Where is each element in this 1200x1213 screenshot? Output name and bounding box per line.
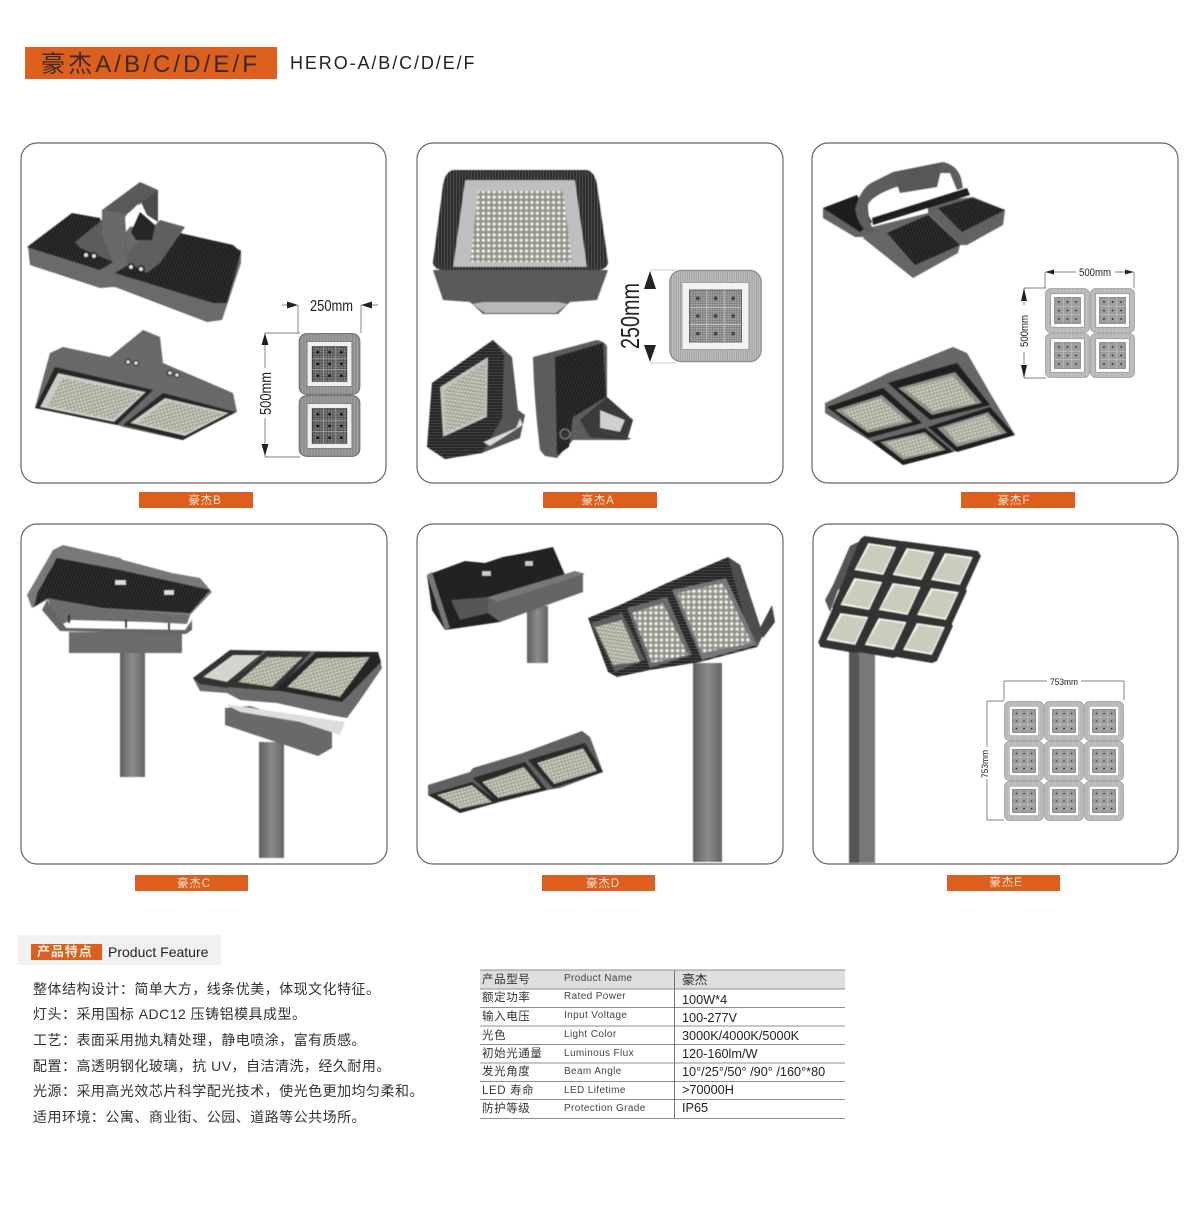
- specification table: IP65: [682, 1101, 708, 1115]
- label: 豪杰C: 豪杰C: [177, 876, 211, 890]
- section heading: product feature: Product Feature: [108, 944, 209, 960]
- specification table: 产品型号: [482, 972, 530, 986]
- feature list: 灯头：采用国标 ADC12 压铸铝模具成型。: [33, 1006, 306, 1022]
- feature list: 适用环境：公寓、商业街、公园、道路等公共场所。: [33, 1109, 366, 1125]
- specification table: 100-277V: [682, 1011, 738, 1025]
- pole lamp: back view D: [427, 547, 585, 663]
- dimension drawing: 250×500mm: 250mm: [310, 298, 353, 315]
- label: 豪杰A: 豪杰A: [581, 493, 615, 507]
- label: 豪杰A: [543, 492, 657, 508]
- pole lamp: front view C: [193, 650, 382, 858]
- dimension drawing: 250mm: [615, 270, 761, 363]
- specification table: Light Color: [564, 1029, 617, 1040]
- pole lamp: front view E: [818, 536, 981, 863]
- panel: 豪杰E: [813, 524, 1178, 864]
- lamp: front view A: [433, 170, 608, 314]
- specification table: 输入电压: [482, 1009, 530, 1023]
- specification table: >70000H: [682, 1083, 734, 1097]
- feature list: 配置：高透明钢化玻璃，抗 UV，自洁清洗，经久耐用。: [33, 1058, 391, 1074]
- lamp: back view B: [27, 182, 241, 322]
- dimension drawing: 500×500mm: [1019, 267, 1135, 378]
- specification table: Input Voltage: [564, 1010, 627, 1021]
- dimension drawing: 250×500mm: 500mm: [258, 372, 275, 415]
- lamp: back view F: [823, 162, 1005, 278]
- specification table: Product Name: [564, 973, 633, 984]
- section heading: product feature: [18, 935, 221, 965]
- panel: 豪杰F: [812, 143, 1178, 483]
- specification table: Rated Power: [564, 991, 626, 1002]
- label: 豪杰B: [139, 492, 253, 508]
- panel: 豪杰A: [417, 143, 783, 483]
- specification table: 120-160lm/W: [682, 1047, 757, 1061]
- lamp: back view A: [533, 340, 633, 458]
- specification table: Luminous Flux: [564, 1048, 634, 1059]
- lamp: angled front view A: [427, 340, 525, 459]
- dimension drawing: 753×753mm: 753mm: [980, 750, 991, 778]
- lamp: front view F: [825, 347, 1015, 465]
- title bar: 豪杰A/B/C/D/E/F: [41, 51, 260, 78]
- specification table: 3000K/4000K/5000K: [682, 1029, 800, 1043]
- subtitle: HERO-A/B/C/D/E/F: [290, 53, 476, 73]
- dimension drawing: 500×500mm: 500mm: [1079, 267, 1111, 279]
- label: 豪杰E: 豪杰E: [989, 875, 1023, 889]
- pole lamp: front view D: [588, 557, 775, 862]
- specification table: LED 寿命: [482, 1083, 534, 1097]
- feature list: [33, 981, 424, 1125]
- specification table: 发光角度: [482, 1064, 530, 1078]
- feature list: 工艺：表面采用抛丸精处理，静电喷涂，富有质感。: [33, 1032, 366, 1048]
- specification table: Protection Grade: [564, 1103, 646, 1114]
- dimension drawing: 250mm: 250mm: [615, 283, 645, 349]
- feature list: 光源：采用高光效芯片科学配光技术，使光色更加均匀柔和。: [33, 1083, 424, 1099]
- specification table: 额定功率: [482, 990, 530, 1004]
- pole lamp: back view C: [27, 545, 212, 777]
- label: 豪杰E: [947, 875, 1060, 891]
- specification table: Beam Angle: [564, 1066, 622, 1077]
- section heading: product feature: 产品特点: [37, 944, 93, 959]
- dimension drawing: 500×500mm: 500mm: [1019, 315, 1031, 347]
- feature list: 整体结构设计：简单大方，线条优美，体现文化特征。: [33, 981, 381, 997]
- specification table: 10°/25°/50° /90° /160°*80: [682, 1065, 825, 1079]
- panel: 豪杰D: [417, 524, 783, 864]
- specification table: [480, 970, 845, 1118]
- specification table: 防护等级: [482, 1101, 530, 1115]
- specification table: 初始光通量: [482, 1046, 542, 1060]
- specification table: LED Lifetime: [564, 1085, 626, 1096]
- panel: 豪杰B: [21, 143, 386, 483]
- label: 豪杰F: [961, 492, 1075, 508]
- label: 豪杰F: 豪杰F: [998, 493, 1030, 507]
- label: 豪杰C: [135, 875, 248, 891]
- dimension drawing: 753×753mm: [980, 677, 1124, 821]
- label: 豪杰D: [542, 875, 655, 891]
- dimension drawing: 250×500mm: [258, 298, 378, 457]
- lamp: front view B: [35, 330, 237, 440]
- label: 豪杰B: 豪杰B: [188, 493, 222, 507]
- lamp: front view D: [428, 731, 603, 813]
- specification table: 豪杰: [682, 972, 708, 987]
- specification table: 光色: [482, 1028, 506, 1042]
- specification table: 100W*4: [682, 993, 727, 1007]
- dimension drawing: 753×753mm: 753mm: [1050, 677, 1078, 688]
- label: 豪杰D: 豪杰D: [586, 876, 620, 890]
- panel: 豪杰C: [21, 524, 387, 864]
